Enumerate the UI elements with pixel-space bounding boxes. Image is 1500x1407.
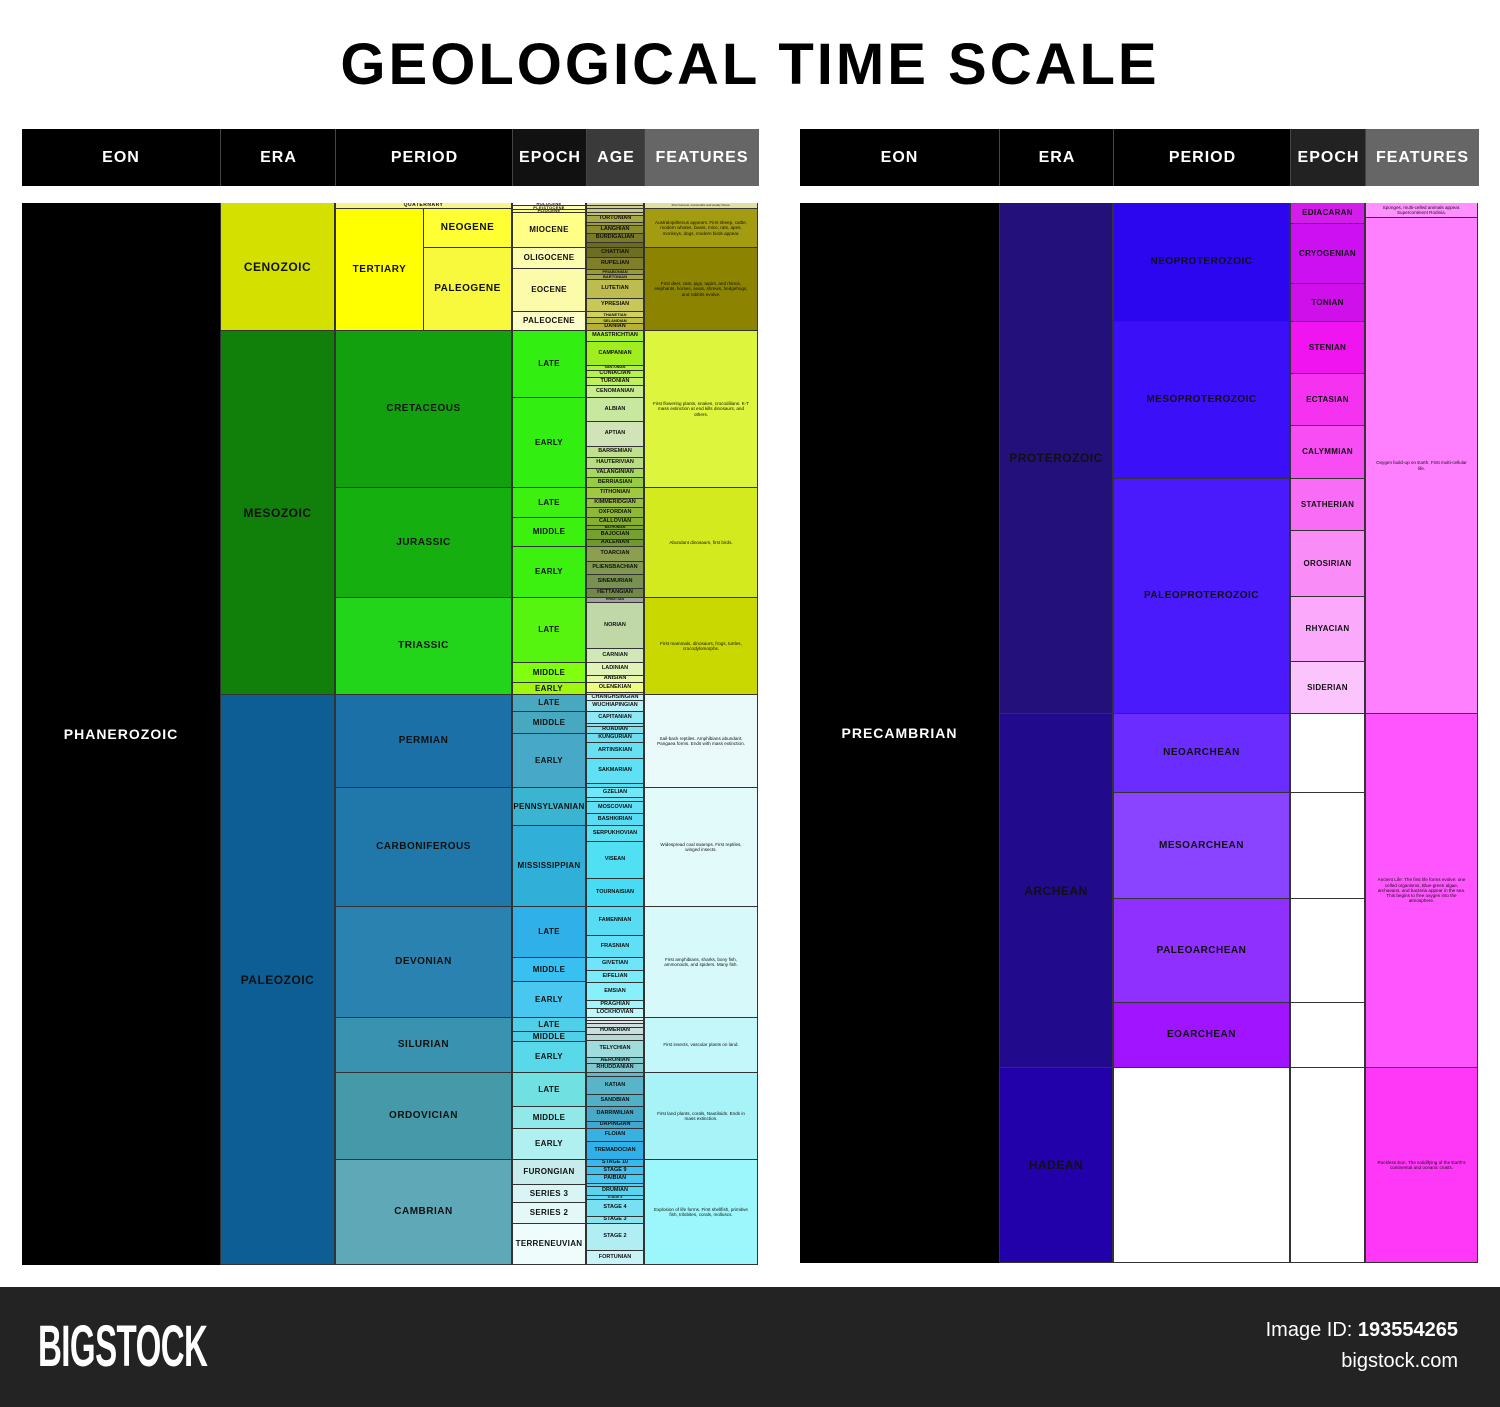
column: ages (left): ALBIAN xyxy=(605,406,625,412)
column: ages (left): LOCKHOVIAN xyxy=(596,1009,633,1015)
column: periods (left): TERTIARY xyxy=(353,264,406,274)
column: epochs (right): EDIACARAN xyxy=(1302,208,1353,217)
panel: precambrian table header: PERIOD xyxy=(1169,148,1236,166)
footer bar xyxy=(0,1287,1500,1407)
column: ages (left): PLIENSBACHIAN xyxy=(592,564,638,570)
column: ages (left): STAGE 4 xyxy=(603,1204,627,1210)
column: epochs (left): SERIES 3 xyxy=(530,1188,568,1198)
column: periods (right): PALEOARCHEAN xyxy=(1157,944,1246,956)
column: periods (left): CAMBRIAN xyxy=(394,1206,453,1217)
column: ages (left): FORTUNIAN xyxy=(599,1254,631,1260)
column: epochs (right): SIDERIAN xyxy=(1307,682,1348,692)
column: ages (left): CENOMANIAN xyxy=(596,388,634,394)
column: ages (left): EIFELIAN xyxy=(602,973,628,979)
column: ages (left): TITHONIAN xyxy=(600,489,630,495)
column: features (left): First insects, vascular plants on land. xyxy=(663,1042,739,1047)
column: ages (left): KIMMERIDGIAN xyxy=(594,499,636,505)
column: ages (left): WUCHIAPINGIAN xyxy=(592,702,638,708)
column: ages (left): CARNIAN xyxy=(602,652,628,658)
column: periods (left): TRIASSIC xyxy=(398,640,449,651)
column: eras (left): CENOZOIC xyxy=(244,260,311,274)
column: periods (left): DEVONIAN xyxy=(395,956,452,967)
column: epochs (left): MIDDLE xyxy=(533,964,565,974)
panel: precambrian table header xyxy=(800,129,1479,186)
column: epochs (left): EARLY xyxy=(535,684,563,692)
column: eras (right): HADEAN xyxy=(1029,1158,1083,1172)
column: ages (left): DARRIWILIAN xyxy=(597,1110,633,1116)
panel: phanerozoic table header: FEATURES xyxy=(655,148,749,166)
panel: phanerozoic table header: EPOCH xyxy=(519,148,581,166)
column: epochs (left): EARLY xyxy=(535,438,563,446)
footer image id: Image ID: 193554265 xyxy=(1266,1319,1458,1341)
column: ages (left): DRUMIAN xyxy=(602,1187,628,1193)
column: epochs (right): OROSIRIAN xyxy=(1303,558,1352,568)
column: ages (left): SANDBIAN xyxy=(600,1097,630,1103)
column: features (right): Rockless Eon. The solidifying of the Earth's continental and oceanic crusts. xyxy=(1377,1160,1466,1170)
column: epochs (left): MIDDLE xyxy=(533,527,565,536)
panel: phanerozoic table header: AGE xyxy=(597,148,635,166)
column: ages (left): FLOIAN xyxy=(605,1131,625,1137)
column: epochs (left): EARLY xyxy=(535,1139,563,1148)
column: eras (right): PROTEROZOIC xyxy=(1009,451,1103,465)
column: eras (left): PALEOZOIC xyxy=(241,972,314,986)
column: ages (left): NORIAN xyxy=(604,622,626,628)
column: ages (left): CAPITANIAN xyxy=(598,714,632,720)
column: periods (left): PALEOGENE xyxy=(434,283,501,294)
column: ages (left): PAIBIAN xyxy=(604,1175,626,1181)
column: ages (left): GIVETIAN xyxy=(602,960,628,966)
column: eras (right) xyxy=(999,203,1113,1263)
column: features (left): First amphibians, sharks, bony fish, ammonoids, and spiders. Many fish. xyxy=(664,957,738,967)
panel: phanerozoic table header: PERIOD xyxy=(391,148,458,166)
column: periods (left): NEOGENE xyxy=(441,222,494,233)
footer logo: BIGSTOCK xyxy=(38,1314,207,1379)
column: periods (left): PERMIAN xyxy=(399,735,448,746)
column: ages (left): HAUTERIVIAN xyxy=(596,459,634,465)
column: ages (left): BURDIGALIAN xyxy=(596,234,634,240)
column: periods (left): ORDOVICIAN xyxy=(389,1110,458,1121)
column: epochs (left): LATE xyxy=(538,359,560,368)
column: periods (left): CRETACEOUS xyxy=(386,403,461,414)
column: ages (left): BAJOCIAN xyxy=(601,531,629,537)
column: ages (left): LUTETIAN xyxy=(601,285,629,291)
column: ages (left): TREMADOCIAN xyxy=(594,1147,636,1153)
column: ages (left): FRASNIAN xyxy=(601,943,629,949)
column: features (left): First mammals, dinosaurs, frogs, turtles, crocodylomorphs. xyxy=(660,641,742,651)
column: periods (left): SILURIAN xyxy=(398,1039,449,1050)
column: ages (left): RUPELIAN xyxy=(601,260,629,266)
column: ages (left): SINEMURIAN xyxy=(598,578,632,584)
panel: phanerozoic table header: ERA xyxy=(260,148,297,166)
eon: precambrian: PRECAMBRIAN xyxy=(842,725,958,741)
column: epochs (left): MIOCENE xyxy=(529,225,569,234)
column: epochs (left): PALEOCENE xyxy=(523,316,575,325)
column: ages (left): BARREMIAN xyxy=(598,448,632,454)
column: ages (left) xyxy=(586,203,644,1265)
column: features (left): Explosion of life forms. First shellfish, primitive fish, trilobites, corals, molluscs. xyxy=(654,1207,748,1217)
column: ages (left): SAKMARIAN xyxy=(598,767,632,773)
column: ages (left): VISEAN xyxy=(605,856,625,862)
column: periods (left): CARBONIFEROUS xyxy=(376,841,471,852)
column: epochs (right): RHYACIAN xyxy=(1306,624,1349,633)
column: eras (left): MESOZOIC xyxy=(243,506,312,520)
column: epochs (left): PENNSYLVANIAN xyxy=(513,802,585,810)
column: ages (left): SERPUKHOVIAN xyxy=(593,830,637,836)
column: epochs (left): LATE xyxy=(538,698,560,707)
column: epochs (left): FURONGIAN xyxy=(523,1167,575,1176)
column: ages (left): MAASTRICHTIAN xyxy=(592,332,638,338)
column: periods (right): NEOARCHEAN xyxy=(1163,747,1240,758)
column: periods (left): JURASSIC xyxy=(396,536,451,548)
column: ages (left): GZELIAN xyxy=(603,789,627,795)
column: ages (left): LADINIAN xyxy=(602,665,628,671)
column: periods (right): PALEOPROTEROZOIC xyxy=(1144,590,1259,601)
column: ages (left): CHATTIAN xyxy=(601,249,629,255)
column: epochs (left): LATE xyxy=(538,1084,560,1094)
column: ages (left): MOSCOVIAN xyxy=(598,804,632,810)
column: epochs (left): OLIGOCENE xyxy=(524,253,574,262)
column: features (left): Widespread coal swamps. First reptiles, winged insects. xyxy=(660,842,742,852)
column: ages (left): APTIAN xyxy=(605,430,625,436)
column: epochs (left): MIDDLE xyxy=(533,718,565,726)
column: epochs (left): MIDDLE xyxy=(533,1112,565,1122)
eon: phanerozoic xyxy=(22,203,220,1265)
column: features (left): Sail-back reptiles. Amphibians abundant. Pangaea forms. Ends with mass extinction. xyxy=(657,736,745,746)
panel: precambrian table header: FEATURES xyxy=(1376,148,1469,166)
column: epochs (left): LATE xyxy=(538,625,560,634)
column: epochs (right): STATHERIAN xyxy=(1301,500,1354,508)
column: ages (left): YPRESIAN xyxy=(601,301,629,307)
column: epochs (left): MIDDLE xyxy=(533,668,565,676)
column: epochs (left): TERRENEUVIAN xyxy=(516,1239,582,1248)
column: features (right): Oxygen build-up on Earth. First multi-cellular life. xyxy=(1376,460,1467,470)
column: epochs (left): EARLY xyxy=(535,994,563,1004)
column: periods (right) xyxy=(1113,203,1290,1263)
column: features (right) xyxy=(1365,203,1478,1263)
panel: precambrian table header: EPOCH xyxy=(1298,148,1359,166)
column: ages (left): BERRIASIAN xyxy=(598,479,632,485)
column: features (left) xyxy=(644,203,758,1265)
column: ages (left): FAMENNIAN xyxy=(599,917,631,923)
column: periods (right): MESOARCHEAN xyxy=(1159,840,1244,850)
column: eras (right): ARCHEAN xyxy=(1024,884,1088,898)
column: ages (left): KATIAN xyxy=(605,1082,625,1088)
panel: precambrian table header: ERA xyxy=(1039,148,1075,166)
column: epochs (right): CRYOGENIAN xyxy=(1299,248,1356,258)
column: epochs (left): EARLY xyxy=(535,1052,563,1061)
column: epochs (left): EARLY xyxy=(535,567,563,576)
column: ages (left): RHUDDANIAN xyxy=(596,1064,634,1070)
column: epochs (right): TONIAN xyxy=(1311,298,1344,306)
column: epochs (left): EARLY xyxy=(535,756,563,764)
column: periods (right): MESOPROTEROZOIC xyxy=(1146,394,1257,405)
footer site: bigstock.com xyxy=(1341,1350,1458,1372)
column: features (right): Ancient Life: The first life forms evolve: one celled organisms, Blue-green algae, archaeans, and bacteria appear in the sea. This begins to free oxygen into the atmosphere. xyxy=(1378,877,1465,903)
column: ages (left): STAGE 2 xyxy=(603,1233,627,1239)
column: ages (left): OLENEKIAN xyxy=(599,684,631,690)
column: ages (left): EMSIAN xyxy=(604,988,626,994)
column: ages (left): BASHKIRIAN xyxy=(598,816,632,822)
column: ages (left): VALANGINIAN xyxy=(596,469,634,475)
column: ages (left): ARTINSKIAN xyxy=(598,747,632,753)
column: ages (left): TOURNAISIAN xyxy=(596,889,634,895)
column: epochs (right): CALYMMIAN xyxy=(1302,447,1353,456)
column: epochs (left): SERIES 2 xyxy=(530,1208,568,1217)
panel: precambrian table header: EON xyxy=(881,148,918,166)
title: GEOLOGICAL TIME SCALE xyxy=(340,32,1160,97)
column: ages (left): CAMPANIAN xyxy=(598,350,632,356)
eon: precambrian xyxy=(800,203,999,1263)
eon: phanerozoic: PHANEROZOIC xyxy=(64,726,178,742)
column: ages (left): TELYCHIAN xyxy=(600,1045,630,1051)
column: epochs (left): LATE xyxy=(538,498,560,506)
column: periods (right): NEOPROTEROZOIC xyxy=(1150,256,1252,267)
panel: phanerozoic table header: EON xyxy=(102,148,140,166)
column: eras (left) xyxy=(220,203,335,1265)
panel: phanerozoic table header xyxy=(22,129,759,186)
column: epochs (right): STENIAN xyxy=(1309,342,1346,352)
column: ages (left): KUNGURIAN xyxy=(598,734,632,740)
column: features (left): First deer, cats, pigs, tapirs, and rhinos, elephants, horses, seals, shrews, hedgehogs, and rabbits evolve. xyxy=(654,281,748,297)
column: features (left): First land plants, corals, Nautiloids. Ends in mass extinction. xyxy=(657,1111,745,1121)
column: epochs (left): LATE xyxy=(538,1020,560,1028)
column: epochs (left): EOCENE xyxy=(531,285,567,294)
column: periods (right): EOARCHEAN xyxy=(1167,1029,1236,1040)
column: periods (left) xyxy=(335,203,512,1265)
column: features (left): Australopithecus appears. First sheep, cattle, modern whales, bears, mice, rats, apes, monkeys, dogs, modern birds appear. xyxy=(655,220,747,236)
column: ages (left): OXFORDIAN xyxy=(598,509,632,515)
column: features (right): Sponges, multi-celled animals appear. Supercontinent Rodinia. xyxy=(1383,205,1460,215)
column: epochs (left) xyxy=(512,203,586,1265)
column: ages (left): TOARCIAN xyxy=(601,550,629,556)
column: features (left): First flowering plants, snakes, crocodilians. K-T mass extinction at end kills dinosaurs, and others. xyxy=(653,401,749,417)
column: epochs (left): MISSISSIPPIAN xyxy=(517,861,581,870)
column: features (left): Abundant dinosaurs, first birds. xyxy=(669,540,733,545)
column: epochs (right) xyxy=(1290,203,1365,1263)
column: ages (left): HETTANGIAN xyxy=(597,589,633,595)
column: epochs (right): ECTASIAN xyxy=(1306,394,1349,404)
column: epochs (left): LATE xyxy=(538,927,560,936)
